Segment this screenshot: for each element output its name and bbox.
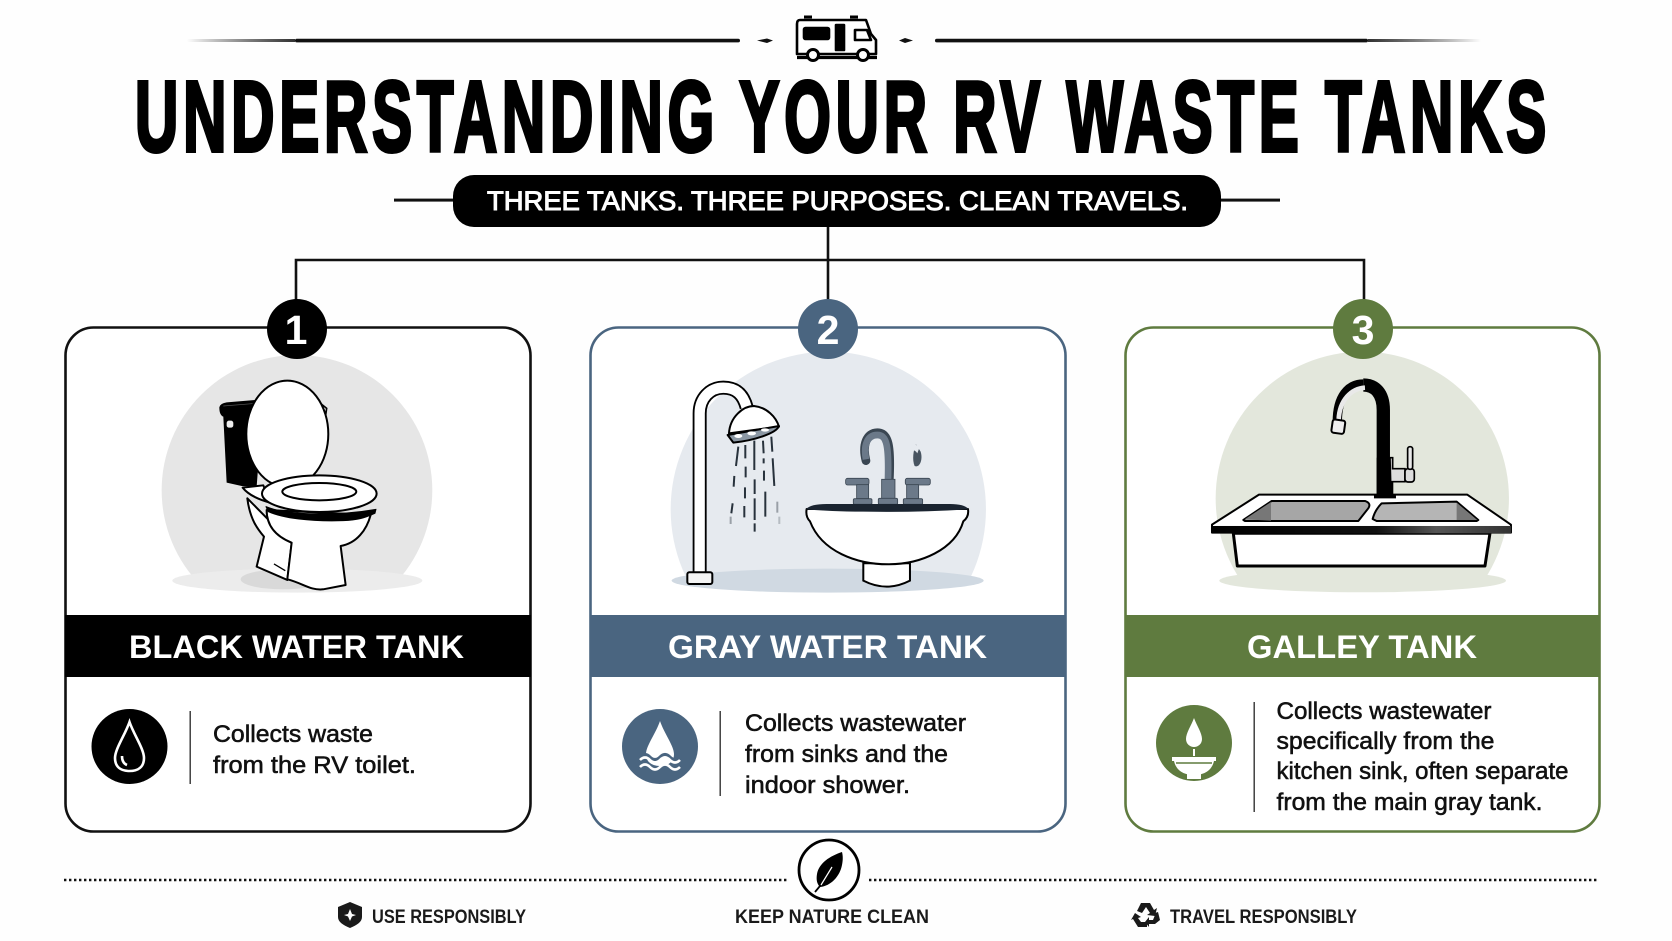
description: specifically from the [1276,728,1494,755]
footer item: use responsibly [338,902,526,928]
description [1254,698,1568,816]
description [720,710,966,799]
description: Collects waste [213,721,373,748]
band: galley tank title: GALLEY TANK [1247,629,1477,665]
illustration: shower and sink [670,352,986,593]
badge 3 [1333,299,1393,359]
subtitle pill [394,175,1280,227]
panel: black water tank [65,328,531,832]
band: gray water tank title: GRAY WATER TANK [668,629,987,665]
footer item: keep nature clean: KEEP NATURE CLEAN [735,907,929,928]
band: galley tank title [1125,615,1600,677]
footer item: travel responsibly [1131,903,1357,928]
footer item: travel responsibly: TRAVEL RESPONSIBLY [1170,907,1357,928]
icon: recycle [1131,903,1160,927]
band: black water tank title: BLACK WATER TANK [129,629,464,665]
badge 1: 1 [285,307,307,353]
description: Collects wastewater [1276,698,1492,725]
icon: water drop [92,709,168,784]
icon: leaf in circle [799,840,859,900]
panel: galley tank [1125,328,1600,832]
description: Collects wastewater [745,710,966,737]
icon: RV camper [797,17,877,60]
description [190,711,416,784]
badge 2: 2 [817,307,839,353]
connector lines [296,227,1364,302]
icon: shield [338,902,362,928]
footer item: use responsibly: USE RESPONSIBLY [372,907,526,928]
badge 3: 3 [1352,307,1374,353]
description: kitchen sink, often separate [1276,758,1568,785]
description: from the main gray tank. [1276,789,1542,816]
badge 1 [267,299,327,359]
description: from the RV toilet. [213,752,416,779]
badge 2 [798,299,858,359]
description: indoor shower. [745,772,910,799]
subtitle pill: THREE TANKS. THREE PURPOSES. CLEAN TRAVELS. [487,186,1188,216]
illustration: kitchen sink [1211,352,1512,592]
illustration: toilet [162,356,432,592]
footer dotted divider [64,879,1599,881]
icon: drop over waves [622,709,698,784]
header rule with RV icon [187,17,1481,60]
panel: gray water tank [590,328,1066,832]
band: black water tank title [65,615,531,677]
description: from sinks and the [745,741,948,768]
icon: drop over basin [1156,705,1232,781]
band: gray water tank title [590,615,1066,677]
